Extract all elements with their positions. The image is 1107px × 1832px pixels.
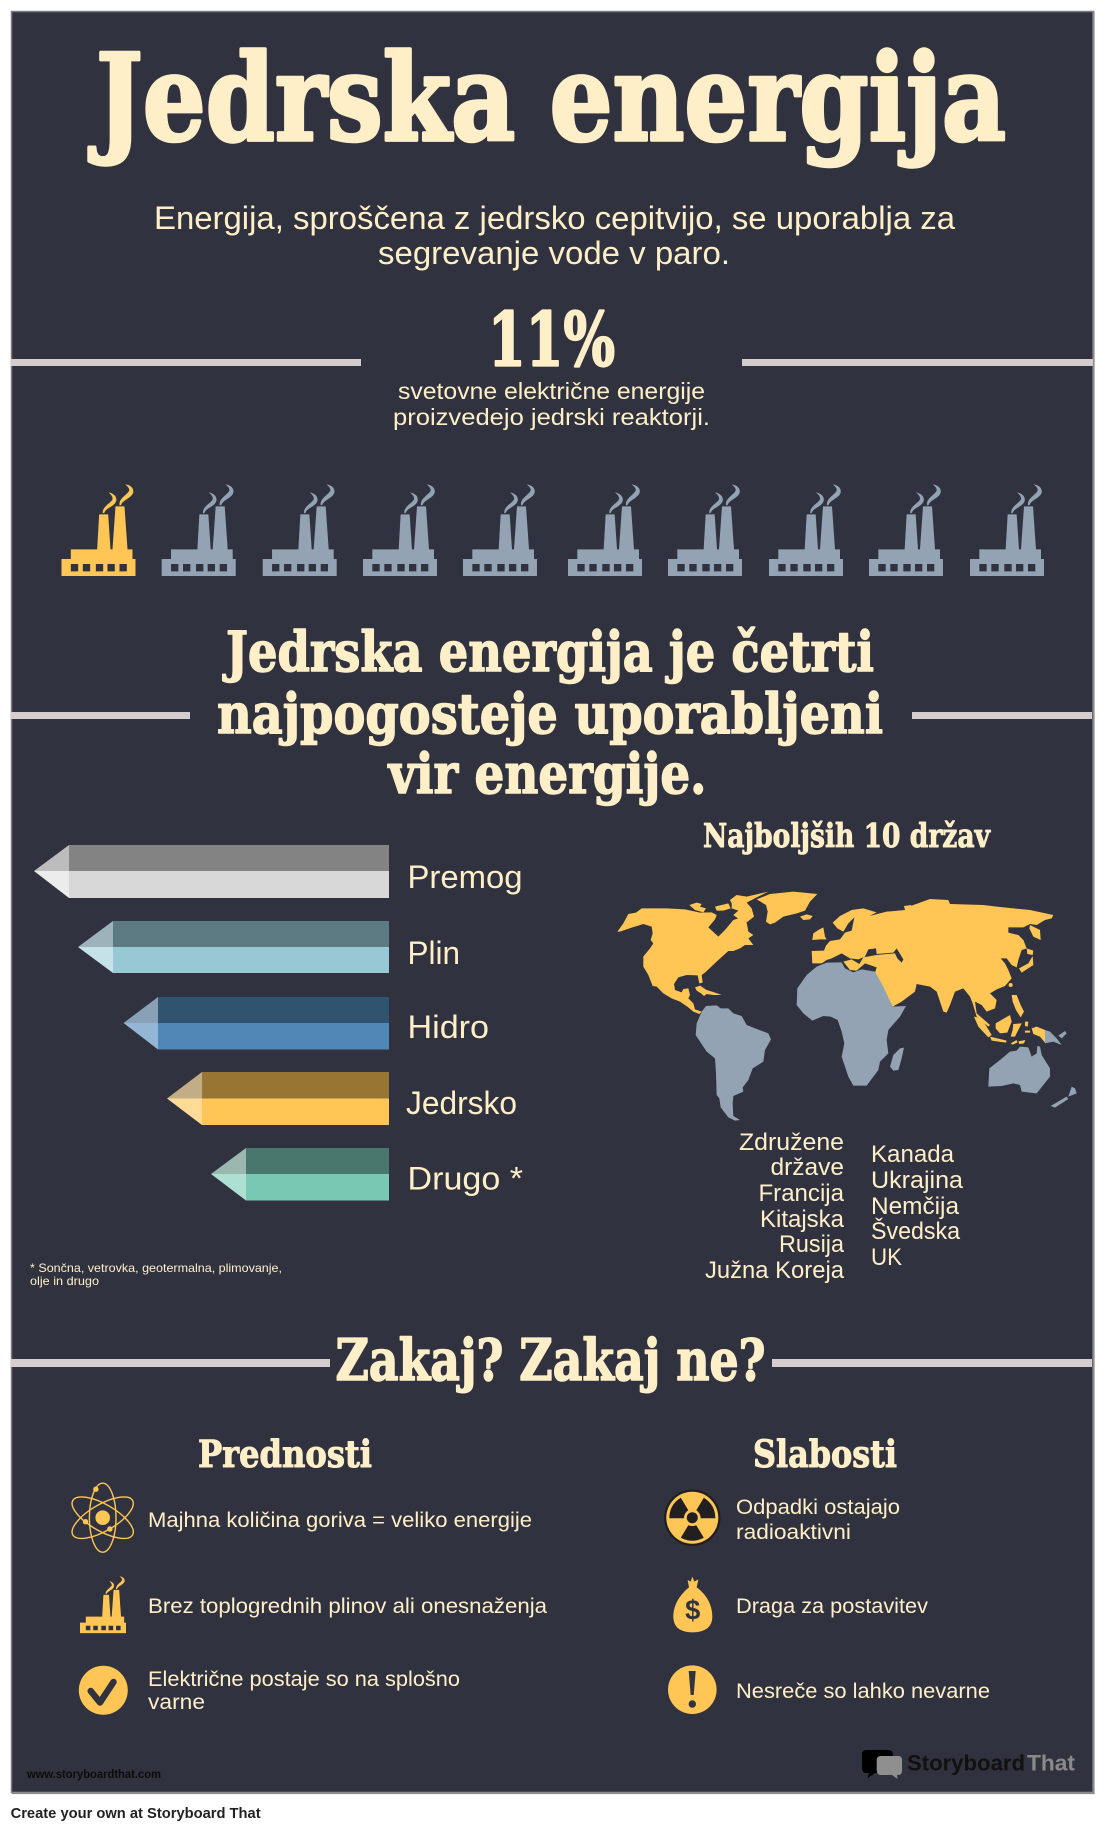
- watermark: website: www.storyboardthat.com: [26, 1769, 161, 1781]
- bar chart: energy sources: [34, 845, 523, 1200]
- text: logo wordmark: Storyboard: [907, 1751, 1025, 1776]
- text: logo wordmark: That: [1027, 1751, 1076, 1776]
- statistic: 11%: 11%: [488, 298, 615, 384]
- label: Plin: Plin: [408, 935, 460, 971]
- footer link text: Create your own at Storyboard That: [11, 1805, 261, 1822]
- list: countries, right column: Ukrajina: [871, 1167, 964, 1194]
- text: dangerous accidents: Nesreče so lahko nevarne: [736, 1680, 990, 1703]
- panel: disadvantages: [664, 1432, 990, 1714]
- list: countries, left column: države: [770, 1154, 844, 1181]
- list: countries, left column: Združene: [739, 1129, 844, 1156]
- heading: fourth most used source: vir energije.: [388, 741, 706, 806]
- bar: Hidro: [124, 997, 389, 1050]
- text: radioactive waste: radioaktivni: [736, 1521, 851, 1544]
- heading: Prednosti: Prednosti: [198, 1432, 372, 1476]
- list: countries, right column: Kanada: [871, 1141, 955, 1168]
- icon: highlighted factory: [62, 484, 135, 576]
- icon: atom: [66, 1483, 139, 1552]
- bar: Drugo: [211, 1148, 389, 1200]
- text: safe power stations: varne: [148, 1691, 205, 1714]
- world map: [617, 892, 1077, 1121]
- icon: speech bubbles: [862, 1750, 902, 1779]
- statistic caption: svetovne električne energije: [398, 378, 705, 404]
- text: small fuel amount: Majhna količina goriva = veliko energije: [148, 1509, 532, 1532]
- pictogram: ten factories, one highlighted: [62, 484, 1044, 576]
- heading: fourth most used source: najpogosteje uporabljeni: [217, 681, 883, 746]
- subtitle text: Energija, sproščena z jedrsko cepitvijo, se uporablja za: [154, 200, 955, 236]
- map: highlighted top countries: [617, 892, 1053, 1045]
- heading: fourth most used source: Jedrska energija je četrti: [222, 619, 874, 684]
- statistic caption: proizvedejo jedrski reaktorji.: [393, 404, 710, 430]
- divider: pros and cons section: [11, 1359, 1092, 1367]
- list: countries, right column: UK: [871, 1244, 902, 1271]
- list: countries, left column: Južna Koreja: [705, 1257, 845, 1284]
- bar: Plin: [78, 921, 389, 973]
- bar: Jedrsko: [167, 1072, 389, 1125]
- icon: factory: [80, 1576, 126, 1633]
- text: no greenhouse gases: Brez toplogrednih plinov ali onesnaženja: [148, 1595, 547, 1618]
- divider: fourth source section: [11, 712, 1092, 719]
- text: expensive to set up: Draga za postavitev: [736, 1595, 929, 1618]
- label: Drugo: Drugo *: [408, 1160, 523, 1196]
- footnote: olje in drugo: [30, 1274, 99, 1288]
- subtitle text: [154, 200, 955, 271]
- icon: radiation: [664, 1489, 721, 1546]
- label: Jedrsko: Jedrsko: [406, 1085, 517, 1121]
- bar: Premog: [34, 845, 389, 898]
- icon: money bag: $: [685, 1594, 700, 1625]
- text: safe power stations: Električne postaje so na splošno: [148, 1668, 460, 1691]
- heading: top 10 countries: Najboljših 10 držav: [703, 816, 991, 855]
- label: Premog: Premog: [408, 859, 522, 895]
- list: countries, left column: Rusija: [779, 1231, 845, 1258]
- text: logo wordmark: [907, 1751, 1076, 1776]
- statistic caption: [393, 378, 710, 430]
- map: other continents: [696, 962, 1077, 1121]
- icon: money bag: [673, 1577, 712, 1632]
- logo: Storyboard That: [862, 1750, 1076, 1779]
- text: radioactive waste: Odpadki ostajajo: [736, 1496, 900, 1519]
- list: countries, left column: Kitajska: [760, 1206, 845, 1233]
- panel: advantages: [66, 1432, 547, 1715]
- heading: Slabosti: Slabosti: [753, 1432, 897, 1476]
- icons: grey factories: [162, 484, 1044, 576]
- list: countries, left column: [705, 1129, 845, 1284]
- icon: check mark: [79, 1666, 128, 1715]
- label: Hidro: Hidro: [408, 1009, 489, 1045]
- subtitle text: segrevanje vode v paro.: [378, 235, 730, 271]
- footnote: [30, 1261, 282, 1288]
- heading: Zakaj? Zakaj ne?: Zakaj? Zakaj ne?: [336, 1327, 766, 1394]
- divider: 11% section: [11, 359, 1093, 366]
- text: safe power stations: [148, 1668, 460, 1714]
- footnote: * Sončna, vetrovka, geotermalna, plimovanje,: [30, 1261, 282, 1275]
- text: radioactive waste: [736, 1496, 900, 1544]
- heading: fourth most used source: [217, 619, 883, 806]
- icon: exclamation mark: [668, 1665, 717, 1714]
- list: countries, right column: Nemčija: [871, 1193, 960, 1220]
- list: countries, left column: Francija: [758, 1180, 845, 1207]
- list: countries, right column: [871, 1141, 964, 1271]
- list: countries, right column: Švedska: [871, 1217, 961, 1245]
